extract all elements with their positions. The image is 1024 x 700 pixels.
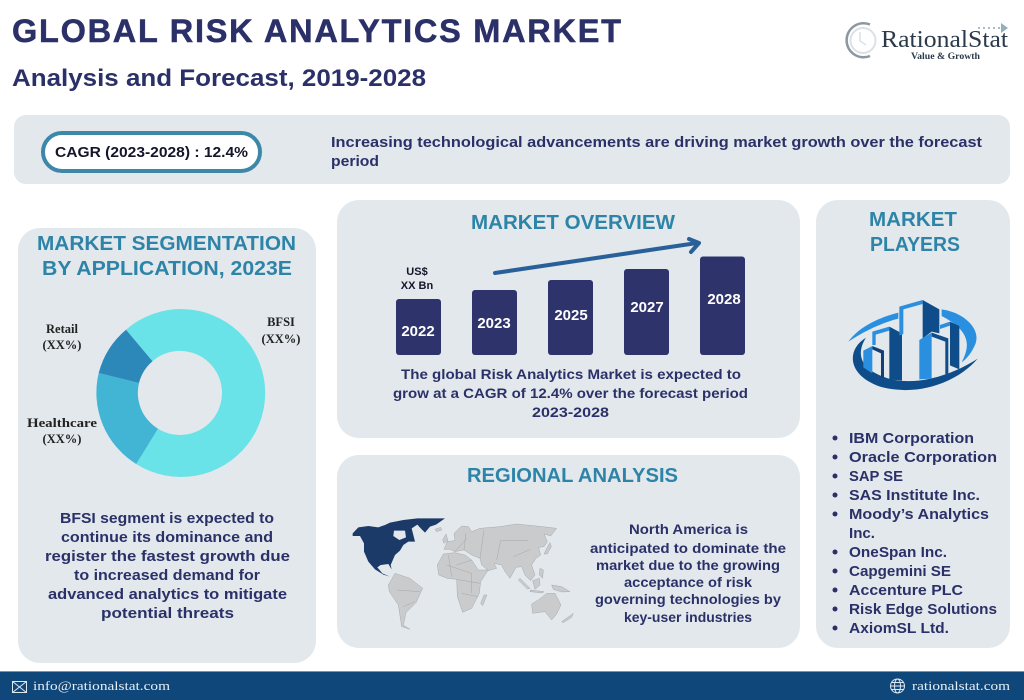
footer bar (0, 671, 1024, 700)
regional text: North America is (629, 521, 748, 537)
players list: Accenture PLC (849, 582, 963, 599)
subtitle: Analysis and Forecast, 2019-2028 (12, 65, 426, 92)
players heading: MARKET (869, 209, 957, 231)
CAGR pill (43, 133, 260, 171)
donut label: BFSI: (XX%) (262, 332, 300, 346)
segmentation text: potential threats (101, 605, 234, 622)
banner text: Increasing technological advancements are driving market growth over the forecast (331, 135, 982, 151)
segmentation text: advanced analytics to mitigate (48, 586, 287, 603)
regional text: anticipated to dominate the (590, 540, 786, 556)
segmentation text: register the fastest growth due (45, 548, 290, 565)
banner text (331, 135, 982, 170)
overview text: The global Risk Analytics Market is expected to (401, 366, 741, 382)
overview text: 2023-2028 (532, 404, 609, 420)
overview text: grow at a CAGR of 12.4% over the forecast period (393, 385, 748, 401)
players list: Moody’s Analytics (849, 506, 989, 523)
donut label: Healthcare: Healthcare (27, 416, 98, 430)
players list: OneSpan Inc. (849, 544, 947, 561)
icon: envelope (12, 682, 26, 692)
bar chart: US$ (406, 266, 428, 278)
banner text: period (331, 154, 379, 170)
players list: IBM Corporation (849, 430, 974, 447)
players heading: PLAYERS (870, 234, 960, 256)
bar chart (396, 256, 745, 355)
bar chart: 2025 (554, 307, 588, 324)
regional text: market due to the growing (596, 557, 780, 573)
footer email: info@rationalstat.com (33, 678, 170, 693)
panel: market players (816, 200, 1010, 648)
panel: market segmentation (18, 228, 316, 663)
map highlight: North America (353, 518, 445, 577)
logo: RationalStat: RationalStat (881, 26, 1008, 53)
regional heading: REGIONAL ANALYSIS (467, 465, 678, 487)
arrow: growth (495, 239, 699, 273)
donut label: Retail (43, 322, 81, 352)
regional text: acceptance of risk (624, 574, 752, 590)
players heading (869, 209, 960, 256)
donut label: BFSI (262, 315, 300, 346)
players list: AxiomSL Ltd. (849, 620, 949, 637)
segmentation text: BFSI segment is expected to (60, 510, 274, 527)
world map (353, 518, 573, 629)
bar chart: 2027 (630, 299, 664, 316)
panel: CAGR banner (14, 115, 1010, 184)
overview heading: MARKET OVERVIEW (471, 212, 675, 234)
segmentation text: continue its dominance and (61, 529, 273, 546)
footer website: rationalstat.com (912, 678, 1010, 693)
logo: RationalStat: Value & Growth (911, 51, 980, 61)
segmentation text: to increased demand for (74, 567, 260, 584)
players list: Capgemini SE (849, 563, 951, 580)
segmentation heading: MARKET SEGMENTATION (37, 233, 296, 255)
panel: market overview (337, 200, 800, 438)
players list: SAP SE (849, 468, 903, 485)
segmentation heading: BY APPLICATION, 2023E (42, 258, 292, 280)
donut label: BFSI: BFSI (267, 315, 295, 329)
players list: Inc. (849, 525, 875, 542)
players list: Oracle Corporation (849, 449, 997, 466)
players list (832, 430, 997, 637)
segmentation text (45, 510, 290, 622)
players list: SAS Institute Inc. (849, 487, 980, 504)
bar chart: 2023 (477, 315, 511, 332)
bar chart: 2022 (401, 323, 435, 340)
regional text (590, 521, 786, 625)
icon: globe (890, 679, 904, 693)
bar chart: XX Bn (401, 280, 433, 292)
overview text (393, 366, 748, 420)
regional text: governing technologies by (595, 591, 781, 607)
segmentation heading (37, 233, 296, 280)
donut label: Healthcare (27, 416, 98, 446)
donut label: Retail: (XX%) (43, 338, 81, 352)
regional text: key-user industries (624, 609, 752, 625)
donut label: Healthcare: (XX%) (43, 432, 81, 446)
panel: regional analysis (337, 455, 800, 648)
CAGR pill: CAGR (2023-2028) : 12.4% (55, 145, 248, 161)
logo: RationalStat (847, 23, 1008, 61)
players list: Risk Edge Solutions (849, 601, 997, 618)
title: GLOBAL RISK ANALYTICS MARKET (12, 13, 621, 49)
donut label: Retail: Retail (46, 322, 78, 336)
bar chart: 2028 (707, 291, 741, 308)
icon: city buildings (848, 300, 978, 390)
donut chart (96, 309, 265, 477)
